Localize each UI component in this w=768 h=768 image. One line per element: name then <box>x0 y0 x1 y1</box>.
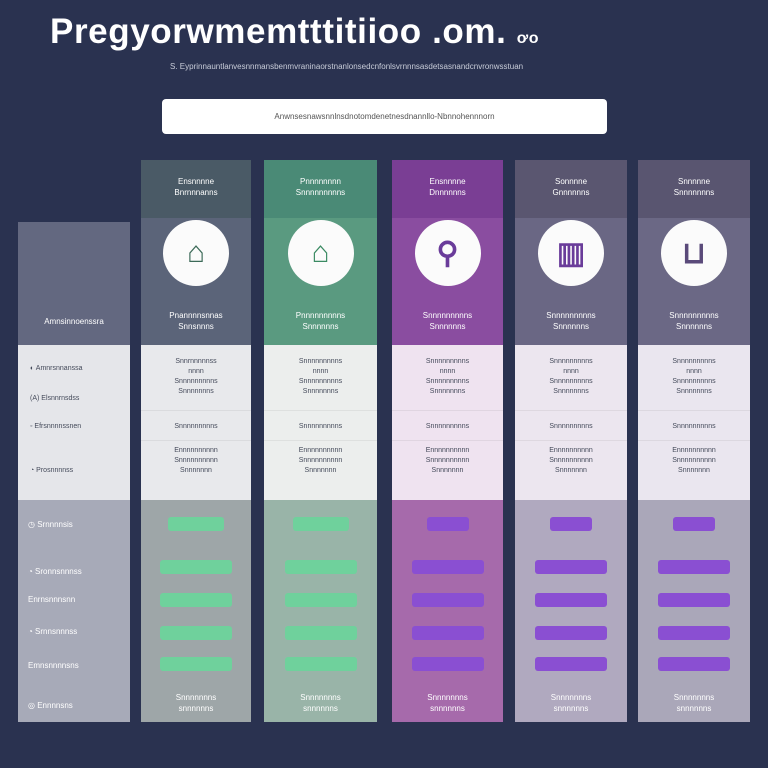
column 1: Snnrnnnnnss <box>175 358 217 365</box>
label column: ◷ Srnnnnsis <box>28 520 73 529</box>
label column: ◐ Amnrsnnanssa <box>30 365 82 372</box>
column 4: Snnnnnnnnns <box>546 311 596 320</box>
column 3: Snnnnnns <box>429 322 466 331</box>
column 4: Snnnnnnnnnn <box>549 457 593 464</box>
column 4: Snnnnnnnnns <box>549 378 593 385</box>
label column: Amnsinnoenssra <box>44 317 104 326</box>
column 5: Snnnnnnnnnn <box>672 457 716 464</box>
label column: ◔ Sronnsnnnss <box>28 567 82 576</box>
column 2: Snnnnnnnnns <box>299 378 342 385</box>
column 4: nnnn <box>563 368 579 375</box>
column 3: Snnnnnnnnns <box>423 311 472 320</box>
column 2: Pnnnnnnnnns <box>296 311 345 320</box>
column 4: Snnnnnnns <box>553 388 589 395</box>
column 2: Ennnnnnnnnn <box>299 447 342 454</box>
column 1 <box>141 160 251 722</box>
column 3: Ennnnnnnnnn <box>426 447 469 454</box>
column 4: Snnnnnnnnns <box>549 423 593 430</box>
column 2: Snnnnnnnnns <box>299 358 342 365</box>
column 3: Snnnnnnnnns <box>426 378 469 385</box>
column 4: Snnnnnnns <box>551 693 591 702</box>
column 2: snnnnnns <box>303 704 338 713</box>
label column: ◔ Prosnnnnss <box>30 467 73 474</box>
column 3: ⚲ <box>436 236 458 270</box>
column 1: Snnnnnnns <box>178 388 214 395</box>
column 1: nnnn <box>188 368 204 375</box>
column 4: snnnnnns <box>554 704 588 713</box>
column 1: Bnrnnnanns <box>174 188 218 197</box>
title: Pregyorwmemtttitiioo .om. ơo <box>50 12 539 51</box>
column 3: Snnnnnnns <box>430 388 465 395</box>
column 5: Snnnnnns <box>676 322 712 331</box>
column 2: ⌂ <box>311 236 330 269</box>
label column: (A) Elsnnrnsdss <box>30 395 79 402</box>
column 5: Snnnnnnn <box>678 467 710 474</box>
column 1: Snnnnnnnnnn <box>174 457 218 464</box>
search bar <box>162 99 607 134</box>
column 3: Snnnnnnn <box>432 467 463 474</box>
column 1: Snnnnnnnnns <box>174 378 218 385</box>
column 2: Snnnnnnnnns <box>299 423 342 430</box>
column 5 <box>638 160 750 722</box>
label column: Emnsnnnnsns <box>28 661 79 670</box>
column 5: Snnnnnnns <box>674 188 714 197</box>
column 4: Snnnnnnn <box>555 467 587 474</box>
column 4: Gnnnnnns <box>553 188 589 197</box>
column 2: Snnnnnnnnns <box>296 188 345 197</box>
column 5: Snnnnnnnnns <box>669 311 719 320</box>
column 1: Snnsnnns <box>178 322 214 331</box>
column 2: Snnnnnnns <box>303 388 338 395</box>
column 5: Ennnnnnnnnn <box>672 447 716 454</box>
column 1: Snnnnnnnnns <box>174 423 218 430</box>
column 2: nnnn <box>313 368 328 375</box>
column 2: Snnnnnnn <box>305 467 336 474</box>
label column: ◎ Ennnnsns <box>28 701 73 710</box>
column 5: ⊔ <box>682 236 706 270</box>
column 1: ⌂ <box>187 236 205 269</box>
column 3: Ensnnnne <box>429 177 466 186</box>
column 1: Pnannnnsnnas <box>169 311 223 320</box>
column 4: ▥ <box>557 236 585 270</box>
column 5: Snnnnnnnnns <box>672 358 716 365</box>
column 4: Ennnnnnnnnn <box>549 447 593 454</box>
column 3 <box>392 160 503 722</box>
column 1: Ennnnnnnnnn <box>174 447 218 454</box>
column 1: Snnnnnnn <box>180 467 212 474</box>
column 2: Pnnnnnnnn <box>300 177 341 186</box>
column 3: Dnnnnnns <box>429 188 466 197</box>
label column: ◔ Srnnsnnnss <box>28 627 77 636</box>
column 5: Snnnnnnnnns <box>672 423 716 430</box>
column 5: Snnnnnnns <box>676 388 712 395</box>
column 5: Snnnnnnnnns <box>672 378 716 385</box>
search bar: Anwnsesnawsnnlnsdnotomdenetnesdnannllo-Nbnnohennnorn <box>274 112 495 121</box>
column 3: nnnn <box>440 368 455 375</box>
column 4: Sonnnne <box>555 177 587 186</box>
column 3: snnnnnns <box>430 704 465 713</box>
column 2: Snnnnnns <box>302 322 339 331</box>
column 1: snnnnnns <box>179 704 213 713</box>
label column: ◦ Efrsnnnnssnen <box>30 423 81 430</box>
column 4 <box>515 160 627 722</box>
column 2: Snnnnnnnnnn <box>299 457 342 464</box>
column 3: Snnnnnnnnnn <box>426 457 469 464</box>
column 3: Snnnnnnnnns <box>426 358 469 365</box>
label column <box>18 222 130 722</box>
column 4: Snnnnnnnnns <box>549 358 593 365</box>
column 1: Ensnnnne <box>178 177 214 186</box>
column 3: Snnnnnnns <box>427 693 468 702</box>
column 5: nnnn <box>686 368 702 375</box>
column 5: Snnnnne <box>678 177 710 186</box>
column 4: Snnnnnns <box>553 322 589 331</box>
column 5: Snnnnnnns <box>674 693 714 702</box>
subtitle: S. Eyprinnauntlanvesnnmansbenmvraninaorstnanlonsedcnfonlsvrnnnsasdetsasnandcnvronwsstuan <box>170 62 523 71</box>
label column: Enrnsnnnsnn <box>28 595 75 604</box>
column 5: snnnnnns <box>677 704 711 713</box>
column 1: Snnnnnnns <box>176 693 216 702</box>
column 2 <box>264 160 377 722</box>
column 3: Snnnnnnnnns <box>426 423 469 430</box>
column 2: Snnnnnnns <box>300 693 341 702</box>
